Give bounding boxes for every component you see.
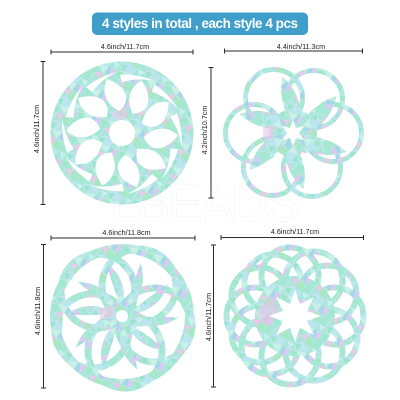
width dimension: 4.6inch/11.7cm (271, 227, 319, 236)
panel: bottom-left suncatcher (33, 228, 195, 388)
panel: bottom-right suncatcher (204, 227, 364, 387)
six-lobed ring flower with star (226, 70, 362, 196)
width dimension (51, 42, 193, 54)
width dimension: 4.6inch/11.8cm (102, 228, 151, 237)
header banner: 4 styles in total , each style 4 pcs (102, 16, 298, 31)
round ring with circles and leaf fan (50, 244, 194, 388)
height dimension: 4.6inch/11.7cm (32, 105, 41, 153)
panel: top-right suncatcher (200, 42, 362, 198)
interlaced flower with star centre (226, 248, 364, 384)
height dimension: 4.6inch/11.8cm (33, 287, 42, 335)
width dimension (51, 228, 195, 240)
width dimension (221, 227, 364, 240)
height dimension: 4.6inch/11.7cm (204, 293, 213, 341)
height dimension (204, 245, 216, 387)
width dimension: 4.4inch/11.3cm (277, 42, 325, 51)
height dimension (32, 61, 46, 205)
height dimension (33, 244, 46, 388)
height dimension: 4.2inch/10.7cm (200, 106, 209, 154)
header banner (92, 12, 308, 35)
height dimension (200, 68, 214, 198)
watermark: LBEADS (110, 175, 300, 233)
width dimension (224, 42, 362, 54)
width dimension: 4.6inch/11.7cm (101, 42, 149, 51)
panel: top-left suncatcher (32, 42, 194, 205)
round disc with swirled petals (50, 62, 194, 204)
